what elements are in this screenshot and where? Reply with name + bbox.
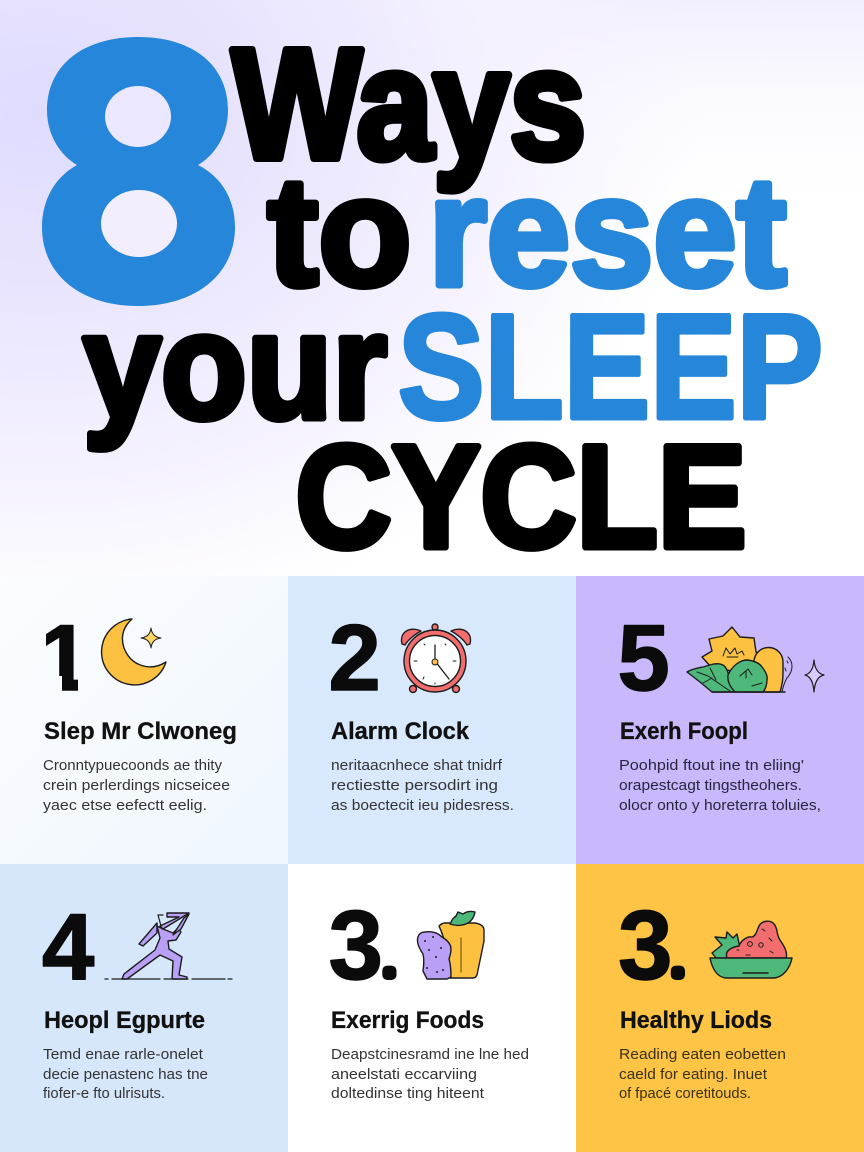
description: as boectecit ieu pidesress. xyxy=(331,797,514,814)
icon: salad bowl xyxy=(710,921,792,978)
number 4: 4 xyxy=(42,894,94,999)
heading: Slep Mr Clwoneg xyxy=(44,718,237,745)
description: orapestcagt tingstheohers. xyxy=(619,777,802,794)
heading: Healthy Liods xyxy=(620,1007,772,1034)
number 3.: 3 xyxy=(618,890,673,1000)
number 3.: . xyxy=(674,949,682,982)
description xyxy=(331,1046,529,1102)
description xyxy=(619,1046,786,1102)
panel: step 1 moon xyxy=(0,576,288,864)
description: doltedinse ting hiteent xyxy=(331,1085,485,1102)
description xyxy=(619,757,821,814)
big number 8: 8 xyxy=(56,8,220,344)
icon: alarm clock xyxy=(401,624,471,692)
heading: Exerrig Foods xyxy=(331,1007,484,1034)
hero background xyxy=(0,0,864,576)
panel: step 3 healthy foods xyxy=(576,864,864,1152)
description: yaec etse eefectt eelig. xyxy=(43,797,207,814)
icon: bread and pepper xyxy=(417,911,484,979)
description: olocr onto y horeterra toluies, xyxy=(619,797,821,814)
icon: greens and fruit xyxy=(687,627,824,692)
description: Temd enae rarle-onelet xyxy=(43,1046,204,1063)
icon: lunging figure xyxy=(105,913,232,979)
title word: CYCLE: CYCLE xyxy=(296,415,746,578)
number 2: 2 xyxy=(328,605,381,710)
title word: to: to xyxy=(268,145,412,318)
panel: step 3 exercise foods xyxy=(288,864,576,1152)
number 1: 1 xyxy=(38,605,90,710)
description: crein perlerdings nicseicee xyxy=(43,777,230,794)
description: Cronntypuecoonds ae thity xyxy=(43,757,222,774)
description: rectiestte persodirt ing xyxy=(331,777,498,794)
number 3.: 3 xyxy=(328,890,383,1000)
description: of fpacé coretitouds. xyxy=(619,1085,751,1102)
title word: your: your xyxy=(83,281,387,450)
description: fiofer-e fto ulrisuts. xyxy=(43,1085,165,1102)
panel: step 5 fresh food xyxy=(576,576,864,864)
description xyxy=(43,1046,208,1102)
description: aneelstati eccarviing xyxy=(331,1066,477,1083)
description: neritaacnhece shat tnidrf xyxy=(331,757,503,774)
description xyxy=(43,757,230,814)
description: Reading eaten eobetten xyxy=(619,1046,786,1063)
number 5: 5 xyxy=(618,605,670,710)
description: caeld for eating. Inuet xyxy=(619,1066,768,1083)
title xyxy=(42,8,823,578)
number 3.: . xyxy=(385,949,394,982)
description: decie penastenc has tne xyxy=(43,1066,208,1083)
description: Deapstcinesramd ine lne hed xyxy=(331,1046,529,1063)
title word: reset: reset xyxy=(428,145,786,318)
description: Poohpid ftout ine tn eliing' xyxy=(619,757,804,774)
heading: Exerh Foopl xyxy=(620,718,748,745)
description xyxy=(331,757,514,814)
panel: step 2 alarm clock xyxy=(288,576,576,864)
title word: Ways: Ways xyxy=(232,17,586,192)
panel: step 4 stretching figure xyxy=(0,864,288,1152)
heading: Heopl Egpurte xyxy=(44,1007,205,1034)
heading: Alarm Clock xyxy=(331,718,470,745)
icon: crescent moon and star xyxy=(102,619,166,685)
